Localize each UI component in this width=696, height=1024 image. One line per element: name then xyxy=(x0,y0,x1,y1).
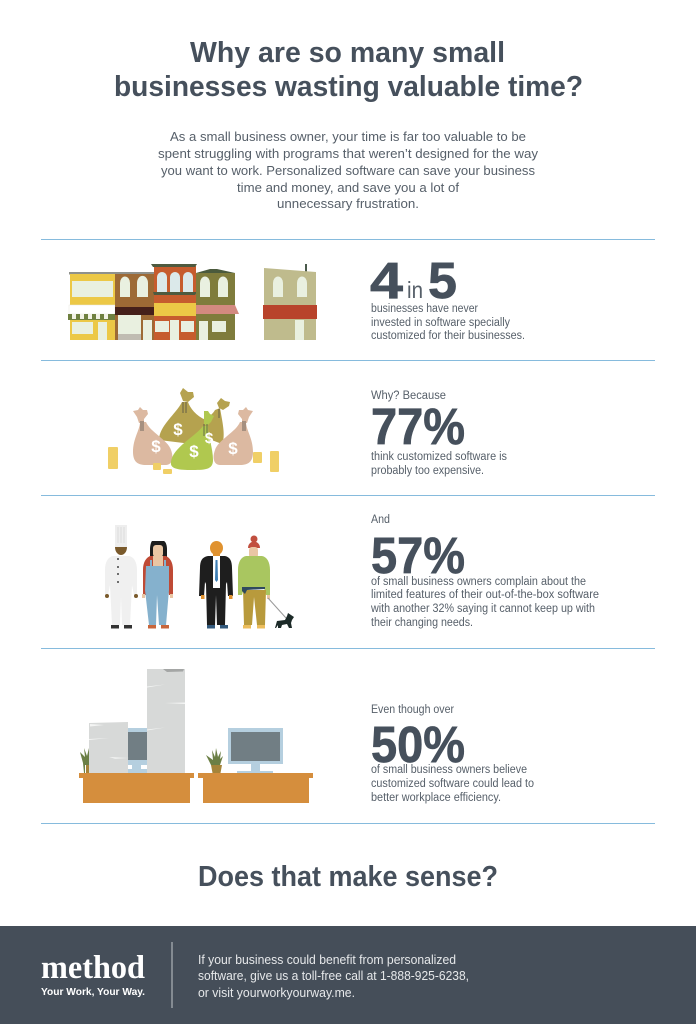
stat: 50%: Even though over xyxy=(371,704,454,716)
stat: 57%: of small business owners complain about the xyxy=(371,576,586,588)
illustration: storefronts xyxy=(68,264,317,340)
illustration: money bags: $ xyxy=(189,442,199,461)
stat: 77%: probably too expensive. xyxy=(371,465,484,477)
stat: 50%: better workplace efficiency. xyxy=(371,792,501,804)
stat: 77%: Why? Because xyxy=(371,390,446,402)
stat: 4 in 5: customized for their businesses. xyxy=(371,330,525,342)
illustration: money bags: $ xyxy=(228,439,238,458)
illustration: money bags: $ xyxy=(173,420,183,439)
title xyxy=(114,37,583,103)
intro paragraph: you want to work. Personalized software can save your business xyxy=(161,164,535,178)
figure: man in suit xyxy=(199,541,233,628)
stat: 4 in 5: 4 xyxy=(370,252,404,309)
footer call to action xyxy=(198,953,469,1000)
footer call to action: or visit yourworkyourway.me. xyxy=(198,986,355,1000)
stat: 57% xyxy=(370,514,599,629)
stat: 50% xyxy=(371,704,534,804)
title: Why are so many small xyxy=(190,37,505,69)
desk with paper stacks xyxy=(79,669,194,803)
stat: 57%: 57% xyxy=(371,527,465,584)
figure: chef xyxy=(105,525,138,628)
figure: woman with dog xyxy=(238,536,294,628)
stat: 50%: of small business owners believe xyxy=(371,764,527,776)
footer xyxy=(0,926,696,1024)
stat: 77%: think customized software is xyxy=(371,451,507,463)
stat: 4 in 5: in xyxy=(407,277,423,303)
intro paragraph: spent struggling with programs that weren’t designed for the way xyxy=(158,147,539,161)
stat: 4 in 5: 5 xyxy=(428,252,457,309)
figure: woman in overalls xyxy=(142,541,173,628)
desk with monitor xyxy=(198,728,313,803)
stat: 57%: And xyxy=(371,514,390,526)
stat: 50%: customized software could lead to xyxy=(371,778,534,790)
stat: 4 in 5: invested in software specially xyxy=(371,317,510,329)
intro paragraph: As a small business owner, your time is far too valuable to be xyxy=(170,130,526,144)
stat: 4 in 5: businesses have never xyxy=(371,303,478,315)
footer call to action: software, give us a toll-free call at 1-888-925-6238, xyxy=(198,969,469,983)
intro paragraph: time and money, and save you a lot of xyxy=(237,181,460,195)
stat: 57%: limited features of their out-of-the-box software xyxy=(371,589,599,601)
intro paragraph: unnecessary frustration. xyxy=(277,197,419,211)
illustration: people xyxy=(105,525,294,628)
intro paragraph xyxy=(158,130,539,211)
stat: 77% xyxy=(371,390,507,477)
stat: 57%: with another 32% saying it cannot keep up with xyxy=(370,603,595,615)
logo: method: method xyxy=(41,950,145,986)
logo: method: Your Work, Your Way. xyxy=(41,987,145,998)
closing question: Does that make sense? xyxy=(198,861,498,893)
stat: 77%: 77% xyxy=(371,398,465,455)
stat: 57%: their changing needs. xyxy=(371,617,473,629)
illustration: money bags xyxy=(108,388,279,474)
illustration: desks xyxy=(79,669,313,803)
illustration: money bags: $ xyxy=(205,430,214,447)
stat: 4 in 5 xyxy=(370,252,525,342)
illustration: money bags: $ xyxy=(151,437,161,456)
title: businesses wasting valuable time? xyxy=(114,71,583,103)
footer call to action: If your business could benefit from personalized xyxy=(198,953,456,967)
stat: 50%: 50% xyxy=(371,716,465,773)
